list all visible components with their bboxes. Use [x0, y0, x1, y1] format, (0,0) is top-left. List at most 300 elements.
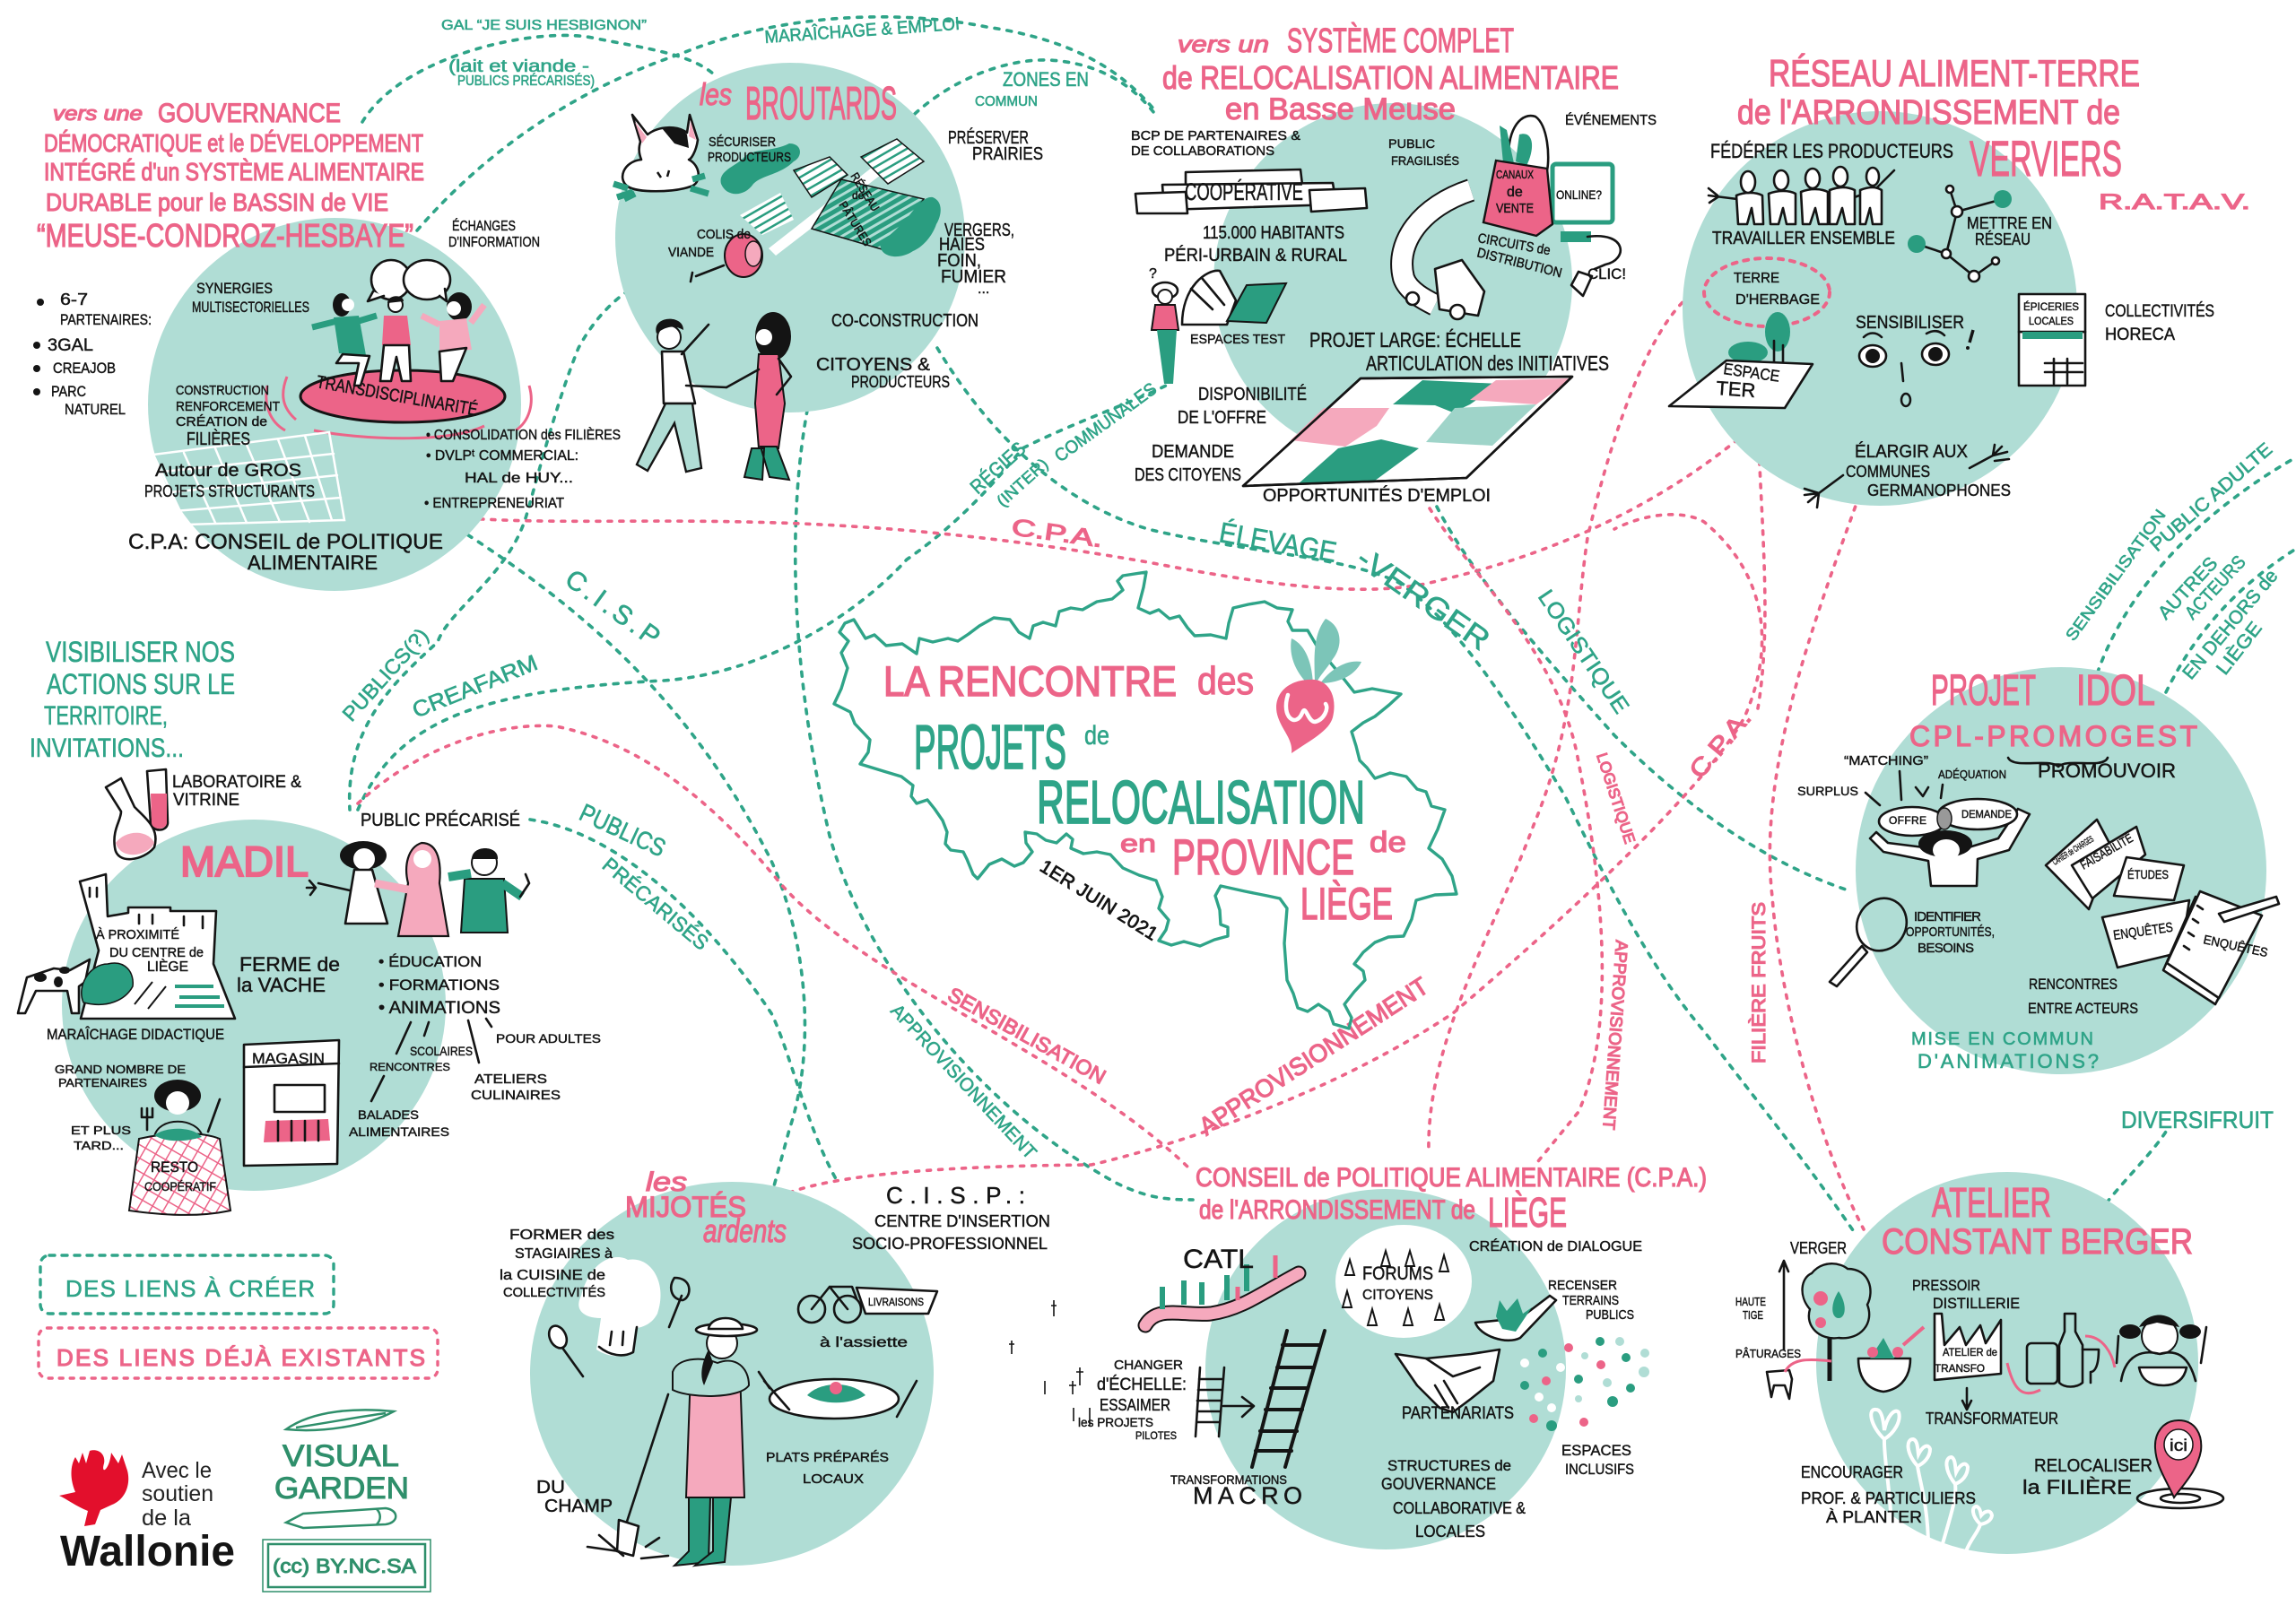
labels: ...	[978, 282, 989, 297]
panel: gouvernance Meuse-Condroz-Hesbaye	[33, 99, 621, 591]
labels: RÉSEAU	[1975, 230, 2031, 248]
heading: GOUVERNANCE	[158, 99, 341, 128]
logo: Wallonie: de la	[142, 1506, 191, 1531]
partner list: PARTENAIRES:	[60, 311, 152, 328]
icon: three people, public précarisé	[307, 810, 529, 936]
icon: laboratory flasks: VITRINE	[173, 791, 239, 810]
labels: VIANDE	[668, 245, 714, 260]
link labels: C.P.A.	[1010, 513, 1104, 552]
labels: DEMANDE	[1152, 442, 1234, 462]
CISP definition: C.I.S.P.:	[886, 1182, 1025, 1209]
CISP definition	[852, 1182, 1050, 1253]
heading: CONSEIL de POLITIQUE ALIMENTAIRE (C.P.A.)	[1196, 1163, 1707, 1193]
icon: factory: DISTILLERIE	[1933, 1295, 2020, 1312]
labels: SYNERGIES	[196, 280, 273, 297]
labels	[1131, 111, 1657, 485]
link labels: (lait et viande -	[448, 57, 589, 76]
icon: orchard tree with height arrow: HAUTE	[1735, 1295, 1766, 1308]
dotted links between projects	[350, 17, 2296, 1255]
icon: factory: TRANSFO	[1935, 1362, 1985, 1375]
labels: ENCOURAGER	[1801, 1463, 1903, 1481]
icon: factory: ATELIER de	[1943, 1346, 1997, 1358]
title lines: de	[1370, 826, 1406, 858]
labels: FORMER des	[509, 1228, 614, 1243]
labels: BCP DE PARTENAIRES &	[1131, 128, 1300, 143]
heading	[1882, 1179, 2193, 1262]
link labels: ZONES EN	[1003, 68, 1089, 91]
heading: PROMOUVOIR	[2038, 759, 2176, 782]
icon: farm with vegetable garden and cow: DU CENTRE de	[109, 945, 204, 960]
labels: PROF. & PARTICULIERS	[1801, 1489, 1976, 1507]
labels: TRANSFORMATIONS	[1170, 1472, 1287, 1487]
link labels: SENSIBILISATION	[944, 983, 1109, 1089]
icon: truck on distribution road	[1402, 190, 1563, 319]
labels: SCOLAIRES	[410, 1044, 473, 1058]
panel: Madil	[18, 636, 601, 1215]
labels: DE L'OFFRE	[1178, 408, 1266, 428]
panel: Atelier Constant Berger	[1735, 1172, 2223, 1556]
icon: radish	[1276, 619, 1361, 753]
grid: projets structurants: Autour de GROS	[155, 461, 301, 481]
labels: • ÉDUCATION	[378, 953, 482, 970]
icon: documents and notebook	[2046, 820, 2279, 1004]
labels: la CUISINE de	[500, 1268, 605, 1283]
labels: FERME de	[239, 953, 340, 976]
labels	[1911, 976, 2138, 1072]
link labels: SENSIBILISATION	[2062, 506, 2170, 644]
logo: Wallonie	[59, 1450, 235, 1575]
labels: CHANGER	[1114, 1358, 1183, 1373]
labels: STRUCTURES de	[1387, 1457, 1511, 1474]
icon: magnifier: IDENTIFIER	[1914, 909, 1981, 924]
panel: les Broutards	[613, 63, 1043, 480]
labels: la VACHE	[237, 974, 326, 996]
icon: offer and demand person: “MATCHING”	[1844, 753, 1928, 768]
labels: PARTENARIATS	[1402, 1404, 1514, 1423]
link labels: CREAFARM	[409, 650, 541, 724]
green note: TERRITOIRE,	[44, 701, 168, 731]
heading: BROUTARDS	[745, 78, 897, 130]
labels: ÉVÉNEMENTS	[1565, 111, 1657, 128]
link labels: COMMUNALES	[1051, 379, 1161, 466]
partner list: 3GAL	[48, 336, 93, 355]
CISP definition: SOCIO-PROFESSIONNEL	[852, 1235, 1048, 1253]
bullets filières	[424, 426, 621, 511]
labels: VERGERS,	[944, 221, 1014, 240]
title lines: de	[1084, 721, 1109, 751]
labels: • ANIMATIONS	[378, 999, 500, 1018]
heading: les	[646, 1167, 687, 1197]
title lines	[883, 657, 1406, 929]
map of pastures: RÉSEAU	[848, 170, 883, 213]
green note: VISIBILISER NOS	[46, 636, 235, 668]
labels: FRAGILISÉS	[1391, 153, 1459, 168]
link labels: LOGISTIQUE	[1593, 751, 1639, 846]
icon: farm with vegetable garden and cow	[18, 874, 235, 1043]
icon: resto coopératif: GRAND NOMBRE DE	[55, 1063, 186, 1076]
bullets filières: • CONSOLIDATION des FILIÈRES	[426, 426, 621, 443]
circle: Terre d'herbage	[1704, 258, 1830, 326]
labels: ÉLARGIR AUX	[1855, 441, 1968, 462]
labels: TRAVAILLER ENSEMBLE	[1712, 229, 1895, 248]
icon: resto coopératif: TARD...	[74, 1139, 124, 1152]
icon: plate of food	[759, 1372, 917, 1419]
icon: CATL worm with plants: CATL	[1183, 1245, 1254, 1274]
labels: les PROJETS	[1078, 1415, 1153, 1429]
labels: ARTICULATION des INITIATIVES	[1366, 352, 1609, 375]
labels: À PLANTER	[1826, 1508, 1922, 1526]
labels: COLLECTIVITÉS	[2105, 302, 2214, 321]
logo: Wallonie: soutien	[142, 1481, 213, 1506]
map of pastures: de	[852, 189, 865, 202]
logo: Visual Garden: VISUAL	[283, 1439, 399, 1473]
labels: PILOTES	[1135, 1429, 1177, 1442]
icon: offer and demand person: ADÉQUATION	[1938, 768, 2006, 781]
labels: BALADES	[358, 1107, 419, 1122]
icon: girl eating	[2085, 1315, 2206, 1385]
green note	[30, 636, 235, 763]
icon: meat parcel	[691, 234, 762, 282]
icon: five linked producers	[1709, 167, 1894, 224]
title lines: RELOCALISATION	[1037, 768, 1365, 837]
labels: PRAIRIES	[972, 144, 1043, 164]
map outline	[834, 572, 1457, 1028]
heading: MIJOTÉS	[625, 1191, 746, 1223]
labels: GERMANOPHONES	[1867, 482, 2011, 499]
heading: CONSTANT BERGER	[1882, 1222, 2193, 1262]
labels: MULTISECTORIELLES	[192, 299, 309, 316]
title lines: PROJETS	[914, 712, 1066, 782]
heading: LIÈGE	[1488, 1189, 1567, 1236]
heading: ardents	[703, 1212, 787, 1249]
icon: offer and demand person	[1797, 753, 2030, 886]
icon: Espace Ter field: ESPACE	[1722, 360, 1781, 386]
labels: COLIS de	[697, 227, 751, 242]
panel: système complet Basse Meuse	[1131, 22, 1657, 506]
heading	[37, 99, 424, 254]
bullets filières: HAL de HUY...	[465, 471, 573, 486]
labels: RENCONTRES	[370, 1061, 450, 1073]
icon: coopérative blocks: COOPÉRATIVE	[1185, 178, 1303, 205]
link labels: (INTER)	[993, 455, 1052, 510]
title lines: des	[1197, 659, 1254, 703]
heading: INTÉGRÉ d'un SYSTÈME ALIMENTAIRE	[44, 158, 424, 186]
labels: CHAMP	[544, 1497, 613, 1516]
green note: ACTIONS SUR LE	[47, 668, 235, 700]
labels: TERRAINS	[1562, 1293, 1619, 1308]
heading	[1162, 22, 1619, 126]
labels: METTRE EN	[1967, 214, 2052, 232]
labels	[500, 1228, 908, 1516]
link labels: PUBLIC ADULTE	[2146, 439, 2276, 556]
panel: Projet IDOL	[1797, 667, 2279, 1074]
labels: PRODUCTEURS	[851, 373, 950, 391]
heading	[1737, 52, 2250, 214]
link labels: MARAÎCHAGE & EMPLOI	[764, 13, 961, 48]
bullets filières: • DVLPᵗ COMMERCIAL:	[426, 448, 578, 464]
heading: “MEUSE-CONDROZ-HESBAYE”	[37, 217, 413, 254]
labels: CONSTRUCTION	[176, 383, 269, 398]
CPA definition: C.P.A: CONSEIL de POLITIQUE	[128, 530, 443, 554]
icon: laboratory flasks	[106, 769, 301, 859]
icon: resto coopératif: COOPÉRATIF	[144, 1179, 216, 1193]
labels: LOCALES	[1415, 1523, 1485, 1541]
labels: DES CITOYENS	[1135, 465, 1241, 485]
heading: RÉSEAU ALIMENT-TERRE	[1769, 52, 2140, 94]
heading: SYSTÈME COMPLET	[1287, 22, 1514, 60]
icon: resto coopératif	[55, 1063, 230, 1215]
icon: rooster	[59, 1450, 128, 1526]
icon: truck on distribution road: DISTRIBUTION	[1475, 245, 1563, 281]
heading	[625, 1167, 787, 1249]
labels: COMMUNES	[1846, 463, 1930, 481]
labels: DU	[536, 1478, 565, 1497]
icon: small and large ladders	[1196, 1331, 1325, 1467]
icon: shopping bag: CANAUX	[1496, 168, 1534, 181]
link labels: LOGISTIQUE	[1533, 586, 1634, 718]
dots: espaces inclusifs	[1520, 1337, 1649, 1431]
labels: ESPACES TEST	[1190, 332, 1285, 347]
icon: orchard tree with height arrow: PÂTURAGES	[1735, 1347, 1801, 1360]
labels: MACRO	[1193, 1482, 1302, 1509]
link labels: GAL “JE SUIS HESBIGNON”	[441, 18, 647, 33]
icon: farm with vegetable garden and cow: LIÈGE	[147, 958, 188, 975]
labels: D'INFORMATION	[448, 235, 540, 250]
labels: GOUVERNANCE	[1381, 1475, 1496, 1493]
icon: Espace Ter field	[1669, 312, 1813, 408]
link labels: PUBLICS(?)	[337, 623, 433, 725]
icon: shopping bag: de	[1507, 185, 1523, 200]
heading: vers un	[1178, 30, 1269, 57]
icon: magnifier	[1830, 890, 1995, 986]
labels: PLATS PRÉPARÉS	[766, 1450, 889, 1465]
link labels: COMMUN	[975, 94, 1038, 109]
labels: POUR ADULTES	[496, 1031, 601, 1046]
labels: COLLABORATIVE &	[1393, 1499, 1526, 1517]
link labels: LIÈGE	[2213, 618, 2266, 679]
icon: documents and notebook: ENQUÊTES	[2112, 920, 2174, 943]
labels: • FORMATIONS	[378, 976, 500, 994]
green note: INVITATIONS...	[30, 733, 184, 763]
labels: à l'assiette	[820, 1335, 908, 1350]
icon: resto coopératif: RESTO	[151, 1159, 198, 1176]
link labels	[337, 13, 2283, 1164]
title lines: PROVINCE	[1172, 829, 1354, 885]
central map: Province de Liège with title	[834, 572, 1457, 1028]
labels: CO-CONSTRUCTION	[831, 311, 978, 331]
labels: RELOCALISER	[2034, 1456, 2152, 1476]
icon: documents and notebook: CAHIER de CHARGES	[2051, 835, 2096, 868]
grid: projets structurants: PROJETS STRUCTURANTS	[144, 482, 315, 500]
circle: Terre d'herbage: TERRE	[1734, 271, 1779, 286]
link labels: EN DEHORS de	[2179, 566, 2283, 683]
labels	[237, 953, 601, 1139]
heading: CPL-PROMOGEST	[1909, 720, 2197, 752]
logo: Visual Garden	[263, 1410, 430, 1592]
partner list: CREAJOB	[53, 360, 116, 377]
link labels: FILIÈRE FRUITS	[1749, 902, 1770, 1063]
icon: farmer and greenhouse	[1149, 266, 1286, 384]
heading: DURABLE pour le BASSIN de VIE	[46, 188, 388, 216]
link labels: PUBLICS PRÉCARISÉS)	[457, 72, 595, 89]
icon: épiceries locales shop: ÉPICERIES	[2023, 299, 2079, 313]
heading: DÉMOCRATIQUE et le DÉVELOPPEMENT	[44, 129, 423, 157]
icon: shopping bag	[1483, 116, 1552, 236]
icon: factory	[1912, 1277, 2058, 1428]
labels	[1078, 1237, 1642, 1541]
icon: coopérative blocks	[1135, 169, 1367, 213]
icon: reaching hands	[1805, 445, 2009, 508]
labels: ATELIERS	[474, 1072, 547, 1087]
puzzle	[1243, 377, 1572, 486]
label under puzzle: OPPORTUNITÉS D'EMPLOI	[1263, 485, 1491, 506]
labels: PROJET LARGE: ÉCHELLE	[1309, 328, 1521, 352]
heading: de l'ARRONDISSEMENT de	[1737, 94, 2120, 132]
labels: PÉRI-URBAIN & RURAL	[1164, 245, 1347, 265]
heading: ATELIER	[1932, 1179, 2051, 1226]
labels: PRODUCTEURS	[708, 150, 791, 165]
heading: les	[700, 78, 732, 112]
labels: RENCONTRES	[2029, 976, 2118, 993]
forums citoyens: CITOYENS	[1362, 1288, 1433, 1303]
circle: Terre d'herbage: D'HERBAGE	[1735, 292, 1820, 308]
labels: PUBLIC	[1388, 136, 1435, 151]
icon: magasin shop: MAGASIN	[252, 1050, 325, 1067]
link labels: PUBLICS	[575, 798, 670, 863]
labels: FUMIER	[941, 267, 1006, 287]
icon: shopping bag: VENTE	[1496, 201, 1534, 216]
labels: PRÉSERVER	[948, 127, 1029, 148]
labels: ENTRE ACTEURS	[2028, 1000, 2138, 1017]
icon: magnifier: BESOINS	[1918, 941, 1974, 956]
labels: RECENSER	[1548, 1278, 1617, 1293]
icon: truck on distribution road: CIRCUITS de	[1476, 230, 1552, 258]
icon: transdisciplinarity table with three people: TRANSDISCIPLINARITÉ	[315, 371, 479, 421]
icon: resto coopératif: PARTENAIRES	[58, 1076, 147, 1089]
icon: Espace Ter field: TER	[1716, 377, 1756, 402]
title lines: LIÈGE	[1300, 879, 1393, 929]
labels: d'ÉCHELLE:	[1097, 1376, 1187, 1394]
link labels: DIVERSIFRUIT	[2121, 1107, 2274, 1133]
link labels: C.P.A.	[1684, 705, 1756, 784]
labels: ESPACES	[1561, 1442, 1631, 1459]
icon: factory: PRESSOIR	[1912, 1277, 1980, 1294]
icon: online screen: CLIC!	[1587, 265, 1626, 282]
date: 1ER JUIN 2021	[1036, 856, 1161, 945]
labels: HORECA	[2105, 325, 2175, 344]
labels: SÉCURISER	[709, 135, 776, 150]
heading: R.A.T.A.V.	[2099, 190, 2250, 214]
panel: les Mijotés ardents	[500, 1167, 1050, 1566]
CISP definition: CENTRE D'INSERTION	[874, 1212, 1050, 1230]
icon: face with eyes	[1859, 330, 1973, 406]
labels: CRÉATION de DIALOGUE	[1469, 1237, 1642, 1254]
icon: fruit cart	[1858, 1327, 1924, 1392]
link labels: -VERGER	[1350, 541, 1496, 657]
heading	[700, 78, 897, 130]
partner list: NATUREL	[65, 401, 126, 418]
icon: resto coopératif: ET PLUS	[71, 1124, 131, 1137]
icon: three people, public précarisé: PUBLIC PRÉCARISÉ	[361, 810, 520, 830]
icon: CATL worm with plants	[1145, 1245, 1299, 1325]
labels: INCLUSIFS	[1565, 1461, 1634, 1478]
partner list: PARC	[51, 383, 86, 400]
icon: orchard tree with height arrow	[1735, 1239, 1871, 1444]
icon: farm with vegetable garden and cow: MARAÎCHAGE DIDACTIQUE	[47, 1026, 224, 1043]
link labels: APPROVISIONNEMENT	[1598, 940, 1631, 1131]
labels: DISPONIBILITÉ	[1198, 384, 1307, 404]
heading: vers une	[53, 102, 143, 125]
legend: liens déjà existants	[39, 1328, 438, 1378]
icon: chef hat, whisk, spoon	[545, 1257, 689, 1376]
labels: HAIES	[939, 235, 985, 255]
panel: Conseil de Politique Alimentaire de Liège	[1009, 1163, 1707, 1549]
licence box	[263, 1540, 430, 1592]
icon: farmer woman with spade	[587, 1318, 757, 1566]
heading: MADIL	[180, 838, 309, 885]
icon: online screen	[1552, 164, 1626, 296]
icon: delivery bike: LIVRAISONS	[868, 1296, 924, 1308]
labels: MISE EN COMMUN	[1911, 1029, 2093, 1049]
link labels: APPROVISIONNEMENT	[1194, 972, 1433, 1141]
labels: LOCAUX	[803, 1471, 864, 1487]
labels: la FILIÈRE	[2022, 1476, 2132, 1498]
labels: DE COLLABORATIONS	[1131, 143, 1274, 159]
labels	[668, 127, 1043, 391]
legend: liens à créer: DES LIENS À CRÉER	[65, 1275, 315, 1302]
labels: ÉCHANGES	[452, 217, 516, 234]
grid: projets structurants	[144, 432, 344, 525]
labels: CRÉATION de	[176, 414, 267, 430]
icon: white sprouts	[1871, 1410, 1992, 1556]
icon: offer and demand person: DEMANDE	[1961, 808, 2012, 820]
icon: location pin: ici	[2170, 1436, 2187, 1454]
partner list	[33, 291, 152, 418]
icon: laboratory flasks: LABORATOIRE &	[172, 773, 301, 792]
title lines: LA RENCONTRE	[883, 657, 1177, 705]
logo: Visual Garden: GARDEN	[274, 1471, 409, 1506]
icon: location pin	[2137, 1420, 2223, 1508]
heading: VERVIERS	[1970, 130, 2122, 187]
link labels: ACTEURS	[2181, 551, 2250, 623]
icon: magnifier: OPPORTUNITÉS,	[1906, 924, 1995, 940]
partner list: 6-7	[60, 291, 88, 308]
labels	[176, 217, 540, 449]
icon: delivery bike	[798, 1287, 937, 1323]
labels: 115.000 HABITANTS	[1203, 223, 1344, 243]
icon: orchard tree with height arrow: TIGE	[1743, 1308, 1763, 1322]
icon: network	[1908, 186, 2012, 282]
icon: offer and demand person: OFFRE	[1889, 814, 1926, 827]
labels: FILIÈRES	[187, 429, 250, 449]
bullets filières: • ENTREPRENEURIAT	[424, 496, 564, 511]
heading: en Basse Meuse	[1225, 92, 1456, 126]
CPA definition: ALIMENTAIRE	[248, 551, 378, 574]
icon: farm with vegetable garden and cow: À PROXIMITÉ	[96, 927, 179, 942]
icon: citizen and producer shaking hands	[637, 312, 791, 480]
labels: CULINAIRES	[471, 1088, 561, 1103]
legend: liens à créer	[40, 1255, 334, 1314]
icon: jar and bottles	[2027, 1314, 2099, 1386]
CPA definition	[128, 530, 443, 574]
icon: scattered seeds	[1009, 1300, 1090, 1426]
icon: épiceries locales shop: LOCALES	[2029, 315, 2074, 327]
labels: D'ANIMATIONS?	[1918, 1050, 2099, 1072]
logo: Wallonie: Avec le	[142, 1458, 212, 1483]
labels	[1710, 140, 2214, 499]
legend: liens déjà existants: DES LIENS DÉJÀ EXISTANTS	[57, 1344, 425, 1371]
heading: de l'ARRONDISSEMENT de	[1199, 1195, 1475, 1225]
